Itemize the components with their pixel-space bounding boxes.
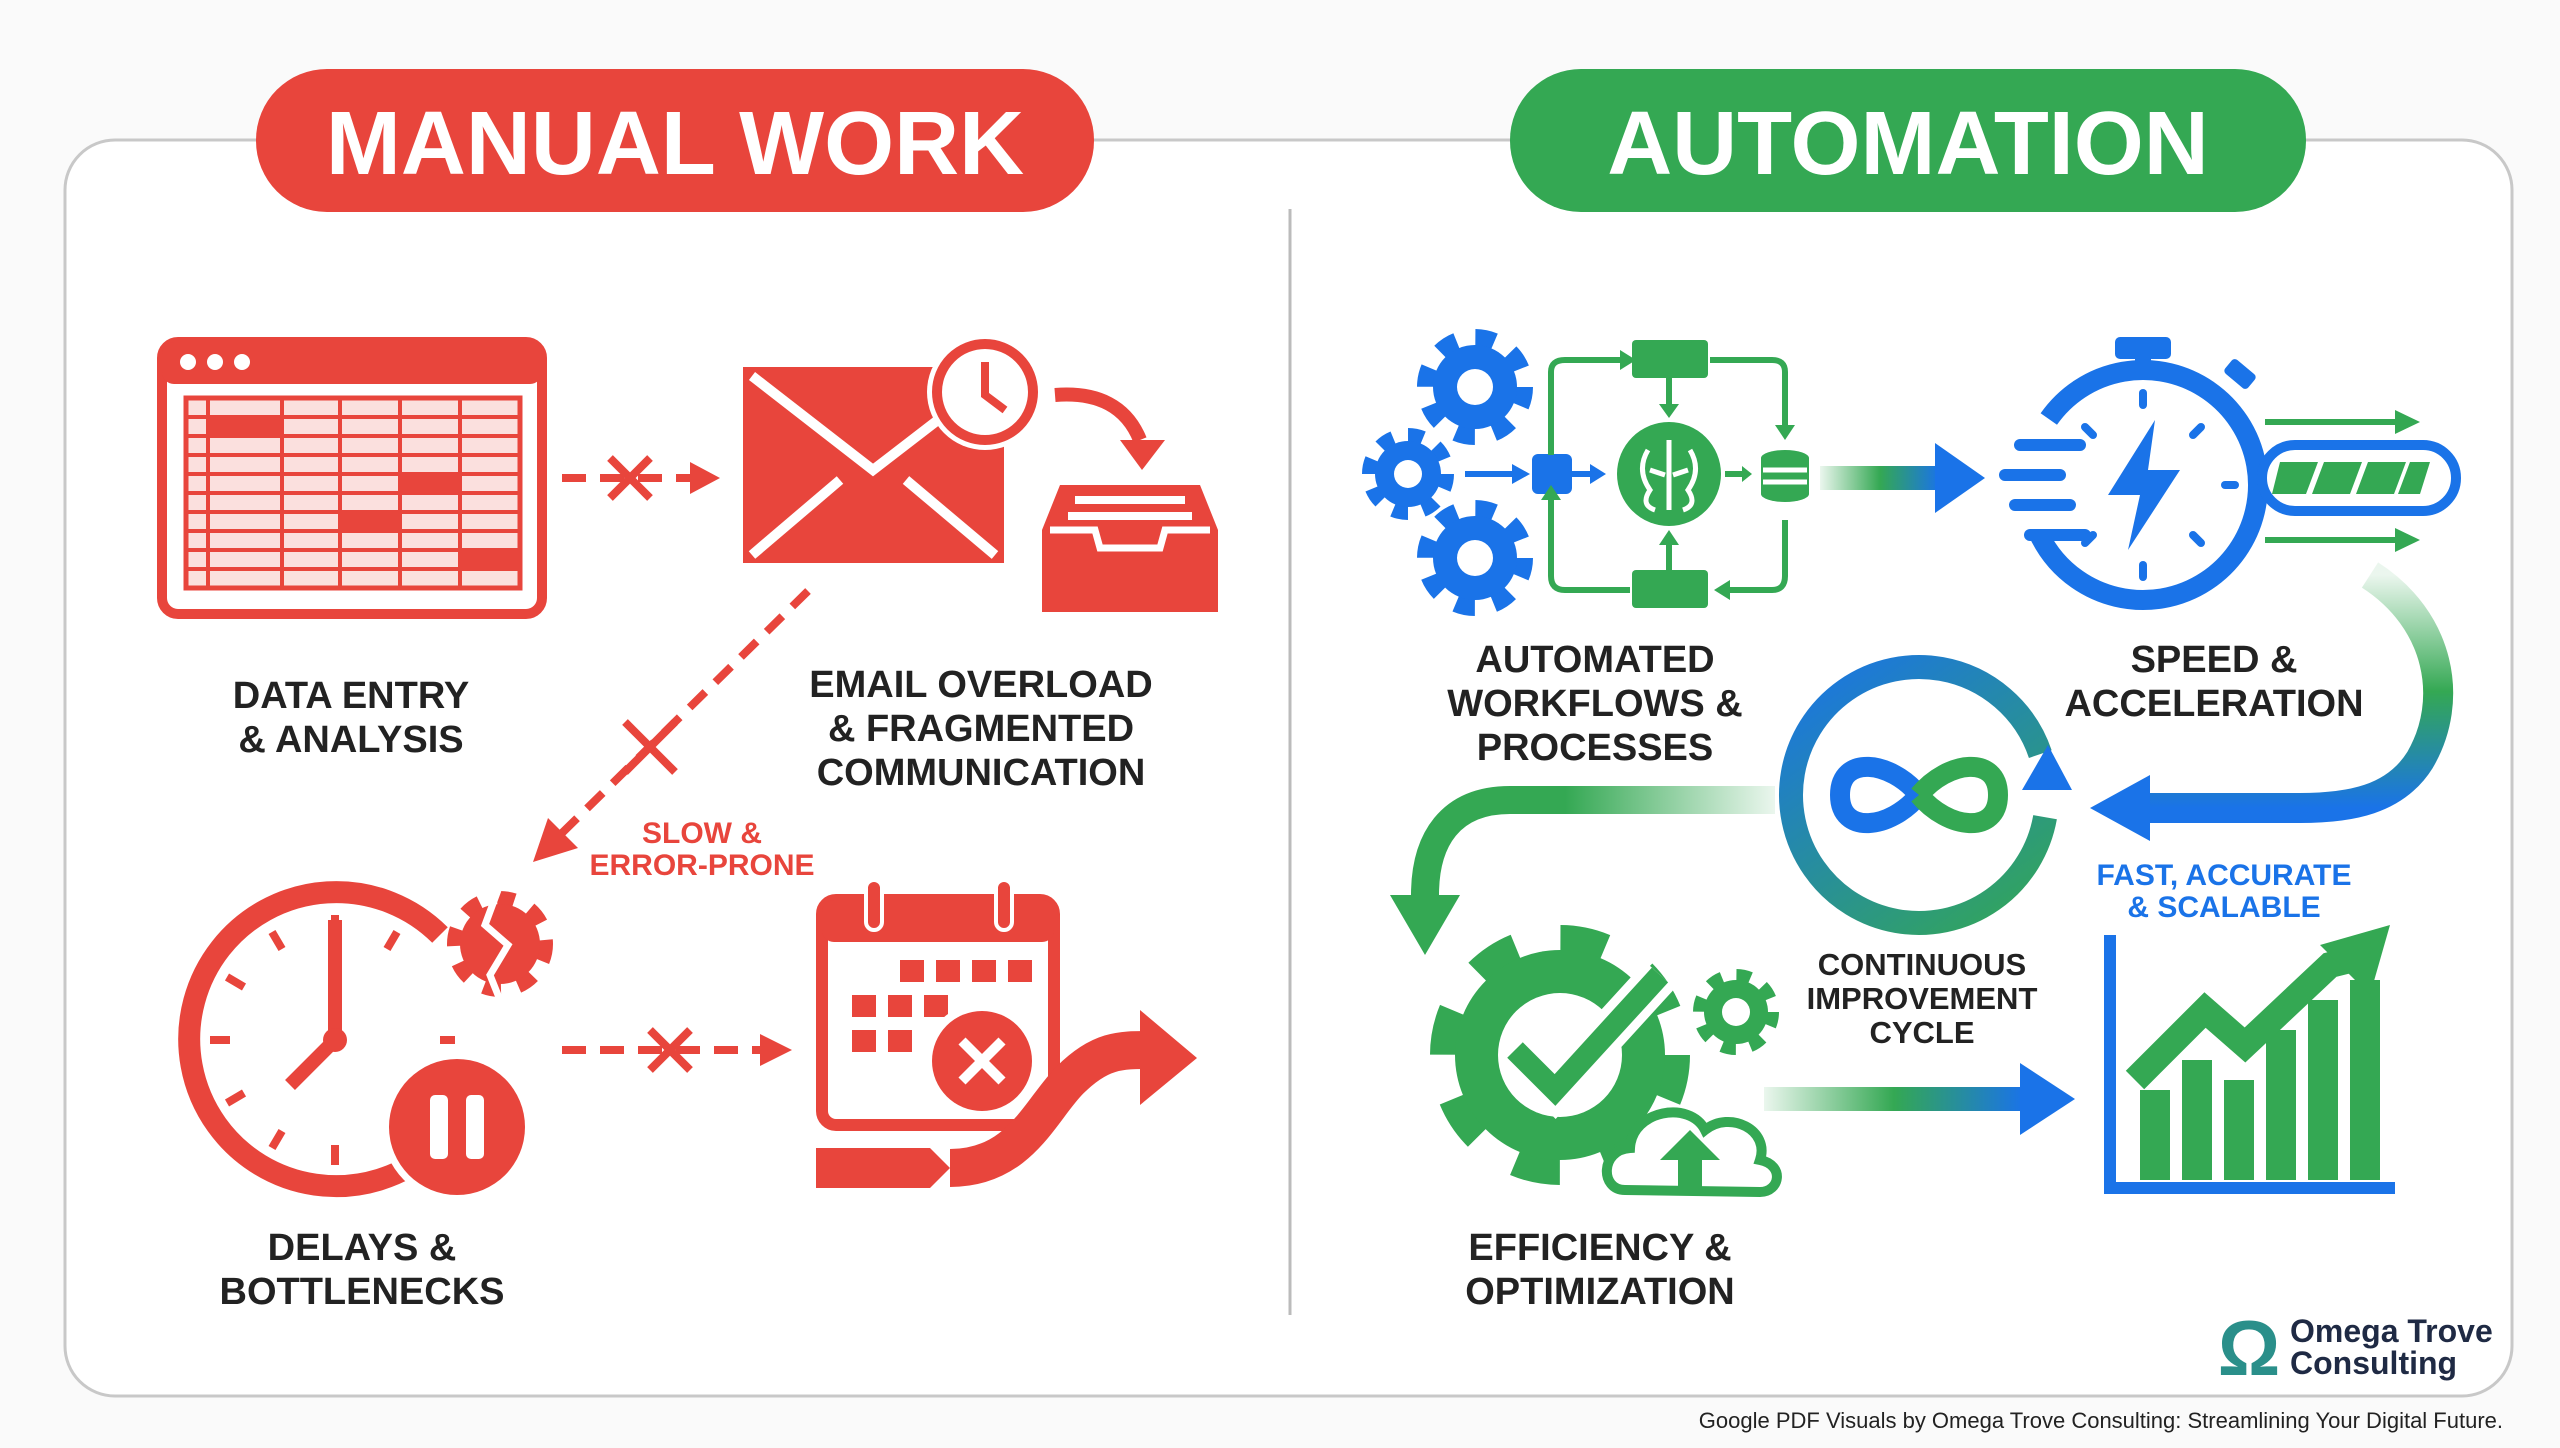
arrow: blocked 3 [562, 1030, 792, 1070]
icon: stopwatch with battery [1983, 325, 2456, 645]
logo: omega trove: Ω [2218, 1304, 2280, 1392]
label: data entry: & ANALYSIS [238, 719, 464, 761]
label: speed: ACCELERATION [2064, 683, 2364, 725]
label: data entry: DATA ENTRY [233, 675, 469, 717]
label: automated workflows: WORKFLOWS & [1447, 683, 1743, 725]
logo: omega trove: Omega Trove [2290, 1313, 2493, 1349]
title: manual work [256, 69, 1094, 212]
label: efficiency: OPTIMIZATION [1465, 1271, 1735, 1313]
arrow: cycle left down to efficiency [1390, 800, 1775, 955]
label: slow and error-prone: SLOW & [642, 817, 762, 850]
arrow: workflows to speed [1820, 443, 1985, 513]
icon: growth chart [2110, 925, 2395, 1188]
label: automated workflows: PROCESSES [1477, 727, 1713, 769]
label: email overload: COMMUNICATION [817, 752, 1145, 794]
label: delays: DELAYS & [268, 1227, 456, 1269]
arrow: diagonal blocked [533, 591, 808, 862]
label: slow and error-prone: ERROR-PRONE [589, 849, 815, 882]
title: automation [1510, 69, 2306, 212]
label: continuous improvement: CYCLE [1869, 1015, 1975, 1050]
label: continuous improvement: IMPROVEMENT [1807, 981, 2037, 1016]
icon: inbox tray [1042, 395, 1218, 612]
title: automation: AUTOMATION [1607, 94, 2209, 194]
logo: omega trove [2218, 1304, 2493, 1392]
label: delays: BOTTLENECKS [220, 1271, 504, 1313]
label: fast accurate: & SCALABLE [2127, 891, 2321, 924]
footer: Google PDF Visuals by Omega Trove Consulting: Streamlining Your Digital Future. [1699, 1408, 2503, 1433]
label: fast accurate: FAST, ACCURATE [2096, 859, 2352, 892]
arrow: blocked 1 [562, 458, 720, 498]
label: speed: SPEED & [2131, 639, 2297, 681]
icon: clock with pause and broken gear [189, 890, 544, 1202]
icon: gear with check and cloud [1448, 943, 1777, 1192]
icon: calendar with detour [816, 880, 1197, 1188]
logo: omega trove: Consulting [2290, 1345, 2457, 1381]
label: continuous improvement: CONTINUOUS [1818, 947, 2026, 982]
label: email overload: & FRAGMENTED [828, 708, 1134, 750]
label: efficiency: EFFICIENCY & [1468, 1227, 1732, 1269]
label: email overload: EMAIL OVERLOAD [809, 664, 1153, 706]
title: manual work: MANUAL WORK [326, 94, 1024, 194]
icon: envelope with clock [743, 334, 1043, 563]
icon: spreadsheet [162, 342, 542, 614]
arrow: efficiency to chart [1764, 1063, 2075, 1135]
icon: continuous improvement cycle [1771, 647, 2072, 943]
icon: automated workflows [1370, 339, 1809, 608]
label: automated workflows: AUTOMATED [1475, 639, 1715, 681]
arrow: curve from speed down to cycle [2090, 575, 2438, 841]
